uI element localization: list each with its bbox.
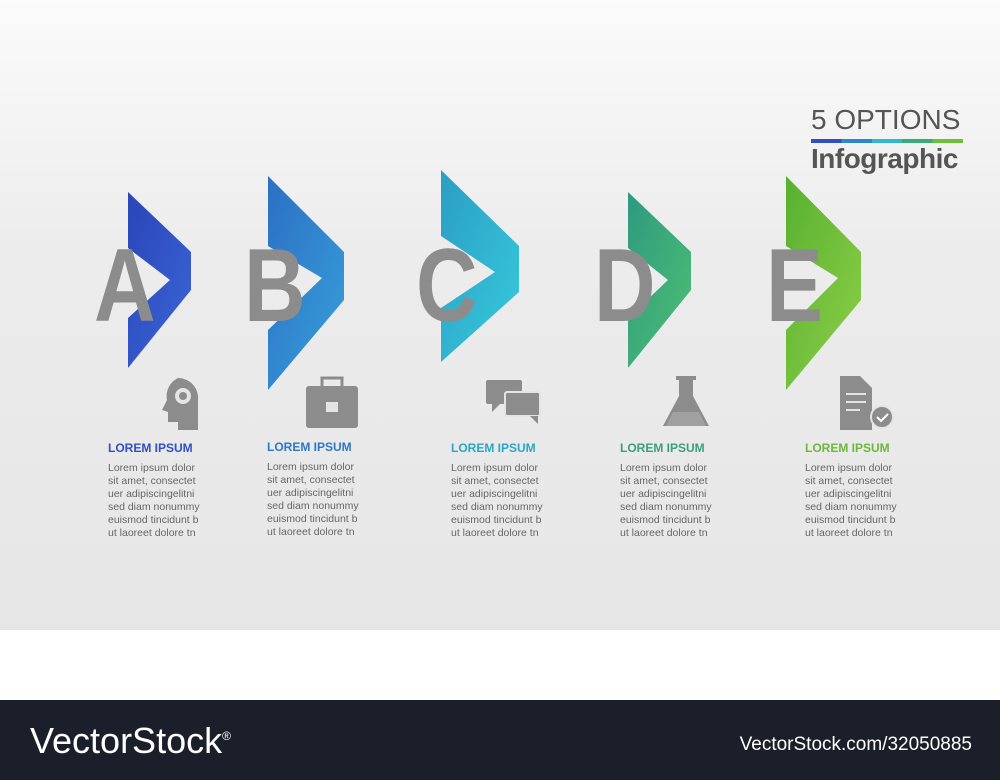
text: LOREM IPSUM bbox=[451, 441, 536, 455]
title: 5 OPTIONS bbox=[811, 104, 960, 135]
letters bbox=[94, 228, 823, 344]
text: Lorem ipsum dolor sit amet, consectet uer adipiscingelitni sed diam nonummy euismod tincidunt b ut laoreet dolore tn bbox=[620, 462, 712, 539]
panel B text bbox=[267, 440, 359, 538]
title bbox=[811, 104, 963, 174]
footer bar bbox=[0, 700, 1000, 780]
text: LOREM IPSUM bbox=[805, 441, 890, 455]
text: Lorem ipsum dolor sit amet, consectet uer adipiscingelitni sed diam nonummy euismod tincidunt b ut laoreet dolore tn bbox=[805, 462, 897, 539]
text: Lorem ipsum dolor sit amet, consectet uer adipiscingelitni sed diam nonummy euismod tincidunt b ut laoreet dolore tn bbox=[108, 462, 200, 539]
letters: A bbox=[94, 228, 156, 344]
title: Infographic bbox=[811, 143, 958, 174]
panel A text bbox=[108, 441, 200, 539]
text: LOREM IPSUM bbox=[267, 440, 352, 454]
panel D text bbox=[620, 441, 712, 539]
icons bbox=[162, 376, 892, 430]
panel C text bbox=[451, 441, 543, 539]
letters: E bbox=[766, 228, 823, 344]
letters: B bbox=[244, 228, 306, 344]
text: LOREM IPSUM bbox=[108, 441, 193, 455]
panel E text bbox=[805, 441, 897, 539]
footer bar: VectorStock® bbox=[30, 720, 231, 761]
letters: D bbox=[594, 228, 656, 344]
text: Lorem ipsum dolor sit amet, consectet uer adipiscingelitni sed diam nonummy euismod tincidunt b ut laoreet dolore tn bbox=[267, 461, 359, 538]
footer bar: VectorStock.com/32050885 bbox=[740, 734, 972, 755]
text: Lorem ipsum dolor sit amet, consectet uer adipiscingelitni sed diam nonummy euismod tincidunt b ut laoreet dolore tn bbox=[451, 462, 543, 539]
text: LOREM IPSUM bbox=[620, 441, 705, 455]
letters: C bbox=[416, 228, 478, 344]
